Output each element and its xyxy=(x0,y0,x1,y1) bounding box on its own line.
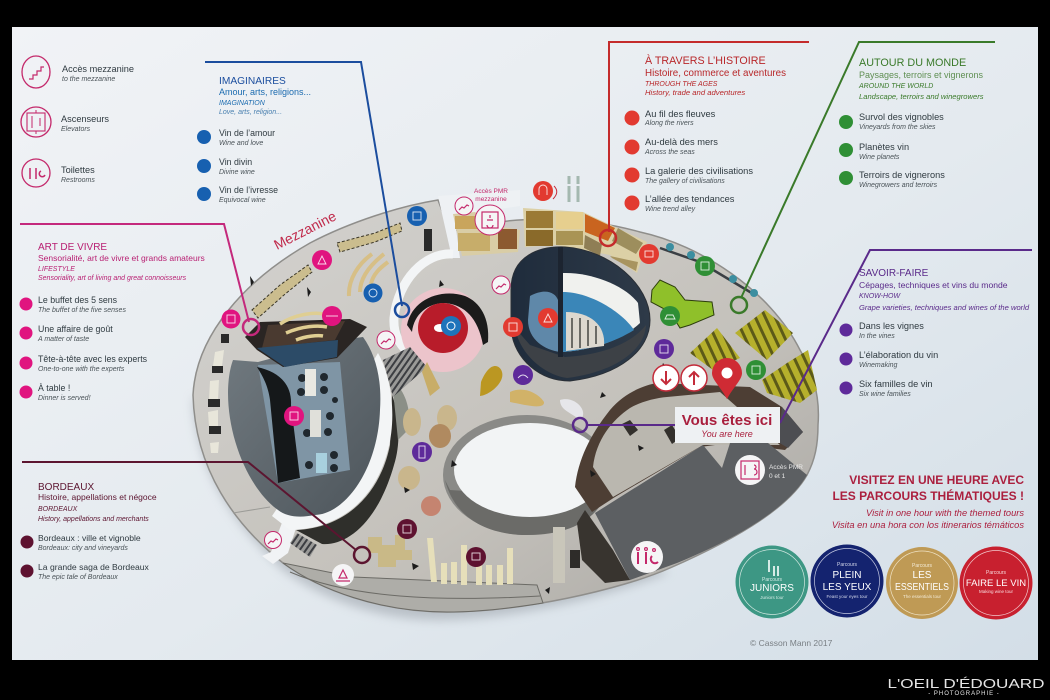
badge: faire le vin: FAIRE LE VIN xyxy=(966,578,1026,589)
badge: plein les yeux: Parcours xyxy=(837,562,857,568)
panel: savoir-faire: Winemaking xyxy=(859,362,898,369)
panel: histoire: Au-delà des mers xyxy=(645,137,718,147)
panel: art de vivre: The buffet of the five senses xyxy=(38,307,126,314)
panel: savoir-faire: In the vines xyxy=(859,333,895,340)
badge: plein les yeux xyxy=(810,544,884,618)
visitors xyxy=(250,276,667,594)
panel: imaginaires: IMAGINATION xyxy=(219,100,266,107)
hexagonal block xyxy=(245,319,367,367)
lift label line 2: 0 et 1 xyxy=(769,473,786,480)
themed tours heading: Visit in one hour with the themed tours xyxy=(866,508,1024,518)
themed tours heading xyxy=(832,473,1024,530)
panel: bordeaux: Bordeaux: city and vineyards xyxy=(38,545,128,552)
label english: You are here xyxy=(701,429,753,439)
copyright: © Casson Mann 2017 xyxy=(750,638,833,648)
panel: histoire: Along the rivers xyxy=(644,120,694,127)
callout markers xyxy=(243,230,747,563)
heading: AUTOUR DU MONDE xyxy=(859,57,966,69)
wooden benches xyxy=(280,313,327,340)
list items xyxy=(20,536,34,578)
label french: Vous êtes ici xyxy=(682,412,772,429)
mezzanine label: Mezzanine xyxy=(271,208,339,253)
mezzanine separation xyxy=(394,254,453,352)
badge: juniors: Juniors tour xyxy=(760,595,784,600)
location pin xyxy=(712,358,742,399)
curved arrow xyxy=(553,186,557,199)
mezzanine access xyxy=(22,56,134,88)
pink mezzanine icons xyxy=(222,250,342,426)
panel: savoir-faire: Dans les vignes xyxy=(859,321,924,331)
white glyphs on colour icons xyxy=(227,185,760,560)
vine rooms xyxy=(690,310,817,403)
panel: art de vivre: Le buffet des 5 sens xyxy=(38,295,118,305)
panel: histoire: History, trade and adventures xyxy=(645,88,745,97)
themed tours heading: VISITEZ EN UNE HEURE AVEC xyxy=(849,473,1024,487)
panel: bordeaux: La grande saga de Bordeaux xyxy=(38,562,150,572)
tour badges xyxy=(736,544,1032,620)
curved dark wall xyxy=(257,367,300,483)
white area above lower floor xyxy=(438,190,520,258)
central ring opening xyxy=(443,415,611,535)
panel: savoir-faire: Six familles de vin xyxy=(859,379,933,389)
themed tours heading: Visita en una hora con los itinerarios témáticos xyxy=(832,520,1024,530)
tasting tables xyxy=(297,369,338,473)
floor soft shadow xyxy=(193,395,670,620)
line: imaginaires xyxy=(205,62,402,306)
badge: juniors: JUNIORS xyxy=(750,583,794,594)
badge: les essentiels xyxy=(886,547,958,619)
heading: SAVOIR-FAIRE xyxy=(859,268,929,279)
panel: autour du monde: Terroirs de vignerons xyxy=(859,170,945,180)
history rooms right xyxy=(523,208,647,273)
heading: IMAGINAIRES xyxy=(219,76,286,87)
toilets: Toilettes xyxy=(61,165,95,175)
badge: les essentiels: Parcours xyxy=(912,563,932,569)
toilets xyxy=(22,159,95,187)
panel: art de vivre: Sensorialité, art de vivre et grands amateurs xyxy=(38,253,205,263)
bordeaux exhibits xyxy=(368,527,580,585)
panel: histoire: Histoire, commerce et aventures xyxy=(645,68,786,79)
tasting line xyxy=(660,243,758,297)
panel: autour du monde: Winegrowers and terroirs xyxy=(859,182,938,189)
red icons xyxy=(503,181,659,337)
panel: histoire: Across the seas xyxy=(644,149,695,156)
left wing seam xyxy=(233,507,270,513)
mezzanine benches xyxy=(349,254,388,296)
panel: bordeaux: History, appellations and merchants xyxy=(38,516,149,523)
heading: BORDEAUX xyxy=(38,482,94,493)
line: savoir-faire xyxy=(780,250,1032,423)
green sculpture xyxy=(651,280,714,328)
panel: savoir-faire: Six wine families xyxy=(859,391,911,398)
themed tours heading: LES PARCOURS THÉMATIQUES ! xyxy=(832,488,1024,503)
panel: histoire: Au fil des fleuves xyxy=(645,109,716,119)
legend xyxy=(21,56,134,187)
main floor xyxy=(193,200,818,612)
panel: savoir-faire: L’élaboration du vin xyxy=(859,350,938,360)
badge: plein les yeux: LES YEUX xyxy=(823,582,872,593)
panel: bordeaux: Histoire, appellations et négoce xyxy=(38,492,157,502)
line: art de vivre xyxy=(20,224,249,322)
list items xyxy=(197,130,211,201)
panel: autour du monde: Wine planets xyxy=(859,154,900,161)
lift label: Accès PMR xyxy=(769,464,803,471)
white facility icons xyxy=(332,455,765,586)
badge: juniors xyxy=(736,546,808,618)
lifts: Elevators xyxy=(61,126,91,133)
white access icons xyxy=(264,197,510,548)
panel: imaginaires xyxy=(197,76,311,204)
panel: imaginaires: Amour, arts, religions... xyxy=(219,87,311,97)
label box xyxy=(675,407,780,443)
panel: bordeaux: Bordeaux : ville et vignoble xyxy=(38,533,141,543)
panel: bordeaux: The epic tale of Bordeaux xyxy=(38,574,118,581)
panel: histoire: THROUGH THE AGES xyxy=(645,81,718,88)
panel: art de vivre xyxy=(20,242,205,402)
panel: art de vivre: Dinner is served! xyxy=(38,395,91,402)
toilets: Restrooms xyxy=(61,177,95,184)
watermark xyxy=(888,676,1044,697)
panel: savoir-faire: Grape varieties, techniques and wines of the world xyxy=(859,303,1030,312)
mezzanine dark block xyxy=(424,229,432,251)
panel: savoir-faire: Cépages, techniques et vins du monde xyxy=(859,280,1008,290)
lifts xyxy=(21,107,109,137)
line: histoire xyxy=(609,42,809,232)
panel: art de vivre: One-to-one with the experts xyxy=(38,366,125,373)
panel: imaginaires: Equivocal wine xyxy=(219,197,266,204)
red table area xyxy=(401,288,488,372)
callout lines xyxy=(20,42,1032,550)
up and down arrows xyxy=(653,365,707,391)
purple icons xyxy=(412,339,674,462)
panel: art de vivre: Sensoriality, art of living and great connoisseurs xyxy=(38,275,187,282)
panel: art de vivre: LIFESTYLE xyxy=(38,266,75,273)
panel: bordeaux xyxy=(20,482,157,581)
panel: art de vivre: Une affaire de goût xyxy=(38,324,113,334)
green icons xyxy=(660,256,766,380)
room inner area xyxy=(258,362,350,483)
panel: imaginaires: Vin de l’ivresse xyxy=(219,185,278,195)
room shadow crescent xyxy=(296,395,398,544)
map icons xyxy=(222,176,803,586)
gap by wing end xyxy=(262,520,296,564)
dark shop xyxy=(577,510,630,583)
central pod xyxy=(511,247,650,381)
panel: savoir-faire xyxy=(840,268,1030,398)
lobby benches xyxy=(622,420,680,444)
watermark: - PHOTOGRAPHIE - xyxy=(928,691,1000,697)
panel: imaginaires: Divine wine xyxy=(219,169,255,176)
icon glyphs xyxy=(268,205,759,581)
mezzanine display cases xyxy=(252,223,402,318)
panel: imaginaires: Vin de l’amour xyxy=(219,128,275,138)
panel: autour du monde: Vineyards from the skies xyxy=(859,124,936,131)
mezzanine access: to the mezzanine xyxy=(62,76,115,83)
stairs xyxy=(383,347,427,397)
panel: autour du monde: Paysages, terroirs et vignerons xyxy=(859,70,984,80)
panel: histoire xyxy=(624,54,786,213)
line: bordeaux xyxy=(22,462,356,550)
badge: les essentiels: ESSENTIELS xyxy=(895,582,949,593)
badge: les essentiels: LES xyxy=(913,570,932,581)
badge: les essentiels: The essentials tour xyxy=(903,594,942,599)
panel: autour du monde: AROUND THE WORLD xyxy=(858,83,933,90)
lobby brown band xyxy=(575,383,803,512)
panel: autour du monde: Planètes vin xyxy=(859,142,909,152)
badge: plein les yeux: PLEIN xyxy=(833,570,861,581)
small stairs xyxy=(290,533,317,557)
panel: imaginaires: Wine and love xyxy=(219,140,263,147)
panel: savoir-faire: KNOW-HOW xyxy=(859,293,901,300)
floor plan xyxy=(193,190,818,620)
line: monde xyxy=(741,42,995,298)
panel: bordeaux: BORDEAUX xyxy=(38,506,78,513)
badge: faire le vin: Parcours xyxy=(986,570,1006,576)
mezzanine access: Accès mezzanine xyxy=(62,64,134,74)
main tasting room xyxy=(228,337,380,517)
right dark wedge xyxy=(778,407,803,448)
blue icons xyxy=(364,206,427,302)
badge: juniors: Parcours xyxy=(762,577,782,583)
wine bottles beside arrow xyxy=(569,176,578,202)
wing furniture xyxy=(208,334,229,453)
sculptures xyxy=(398,362,583,516)
panel: imaginaires: Vin divin xyxy=(219,157,252,167)
badge: faire le vin xyxy=(960,546,1032,620)
panel: histoire: La galerie des civilisations xyxy=(645,166,753,176)
list items xyxy=(840,324,852,394)
line: savoir-faire marker xyxy=(587,424,675,426)
panel: histoire: Wine trend alley xyxy=(645,206,696,213)
panel: autour du monde: Landscape, terroirs and winegrowers xyxy=(859,92,984,101)
panel: art de vivre: A matter of taste xyxy=(37,336,89,343)
grey floor by crescent xyxy=(392,380,409,440)
bottom walkway xyxy=(283,563,543,612)
panel: art de vivre: Tête-à-tête avec les experts xyxy=(38,354,148,364)
access label line 2: mezzanine xyxy=(475,196,507,203)
lifts: Ascenseurs xyxy=(61,114,109,124)
lobby floor xyxy=(593,392,780,497)
panel: autour du monde: Survol des vignobles xyxy=(859,112,944,122)
heading: À TRAVERS L’HISTOIRE xyxy=(645,54,766,67)
heading: ART DE VIVRE xyxy=(38,242,107,253)
panel: histoire: The gallery of civilisations xyxy=(645,178,725,185)
panel: imaginaires: Love, arts, religion... xyxy=(219,109,282,116)
watermark: L'OEIL D'ÉDOUARD xyxy=(888,676,1044,691)
list items xyxy=(839,115,853,185)
access label: Accès PMR xyxy=(474,188,508,195)
maroon icons xyxy=(397,519,486,567)
panel: autour du monde xyxy=(839,57,984,189)
history rooms left xyxy=(453,212,520,256)
list items xyxy=(20,298,32,398)
white crescent xyxy=(272,353,392,530)
auditorium dark block xyxy=(595,443,807,580)
panel: art de vivre: À table ! xyxy=(38,383,70,393)
you are here marker xyxy=(675,358,780,443)
panel: histoire: L’allée des tendances xyxy=(645,194,735,204)
list items xyxy=(624,110,640,210)
badge: plein les yeux: Feast your eyes tour xyxy=(826,594,868,599)
badge: faire le vin: Making wine tour xyxy=(979,589,1014,594)
